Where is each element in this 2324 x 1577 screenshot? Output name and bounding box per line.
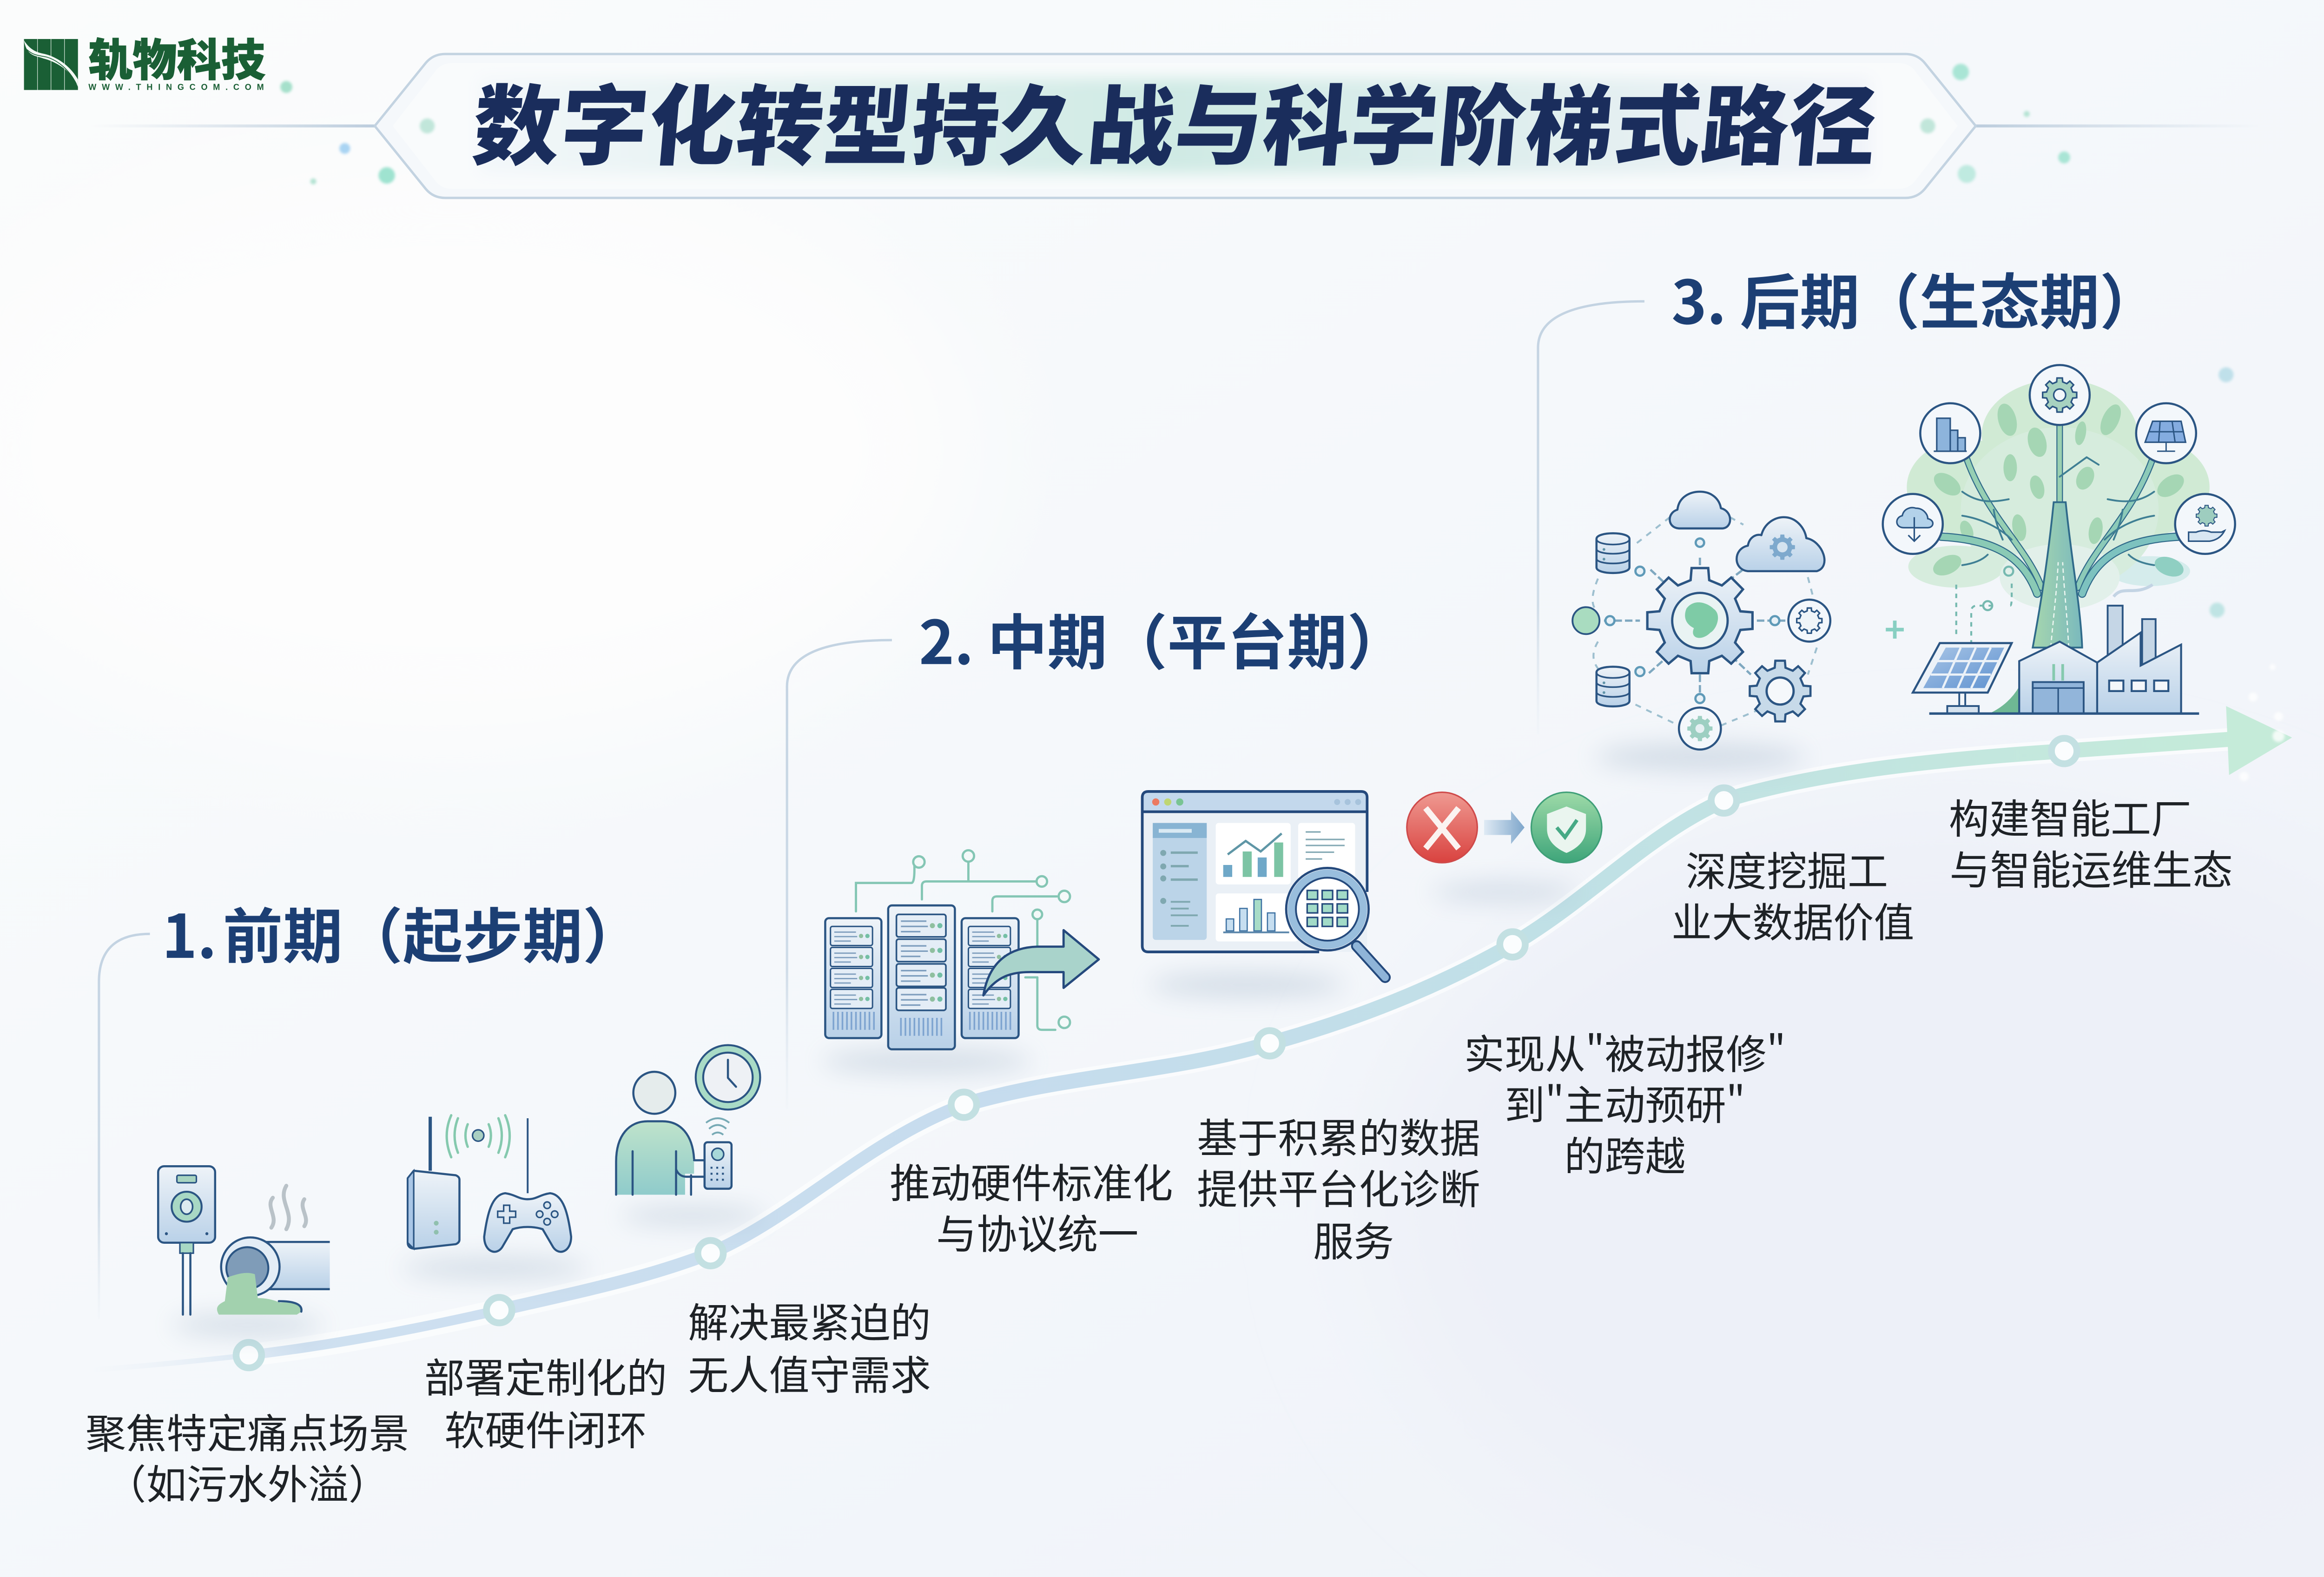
milestone text: 构建智能工厂与智能运维生态: 与智能运维生态	[1949, 838, 2233, 897]
title text: 数字化转型持久战与科学阶梯式路径	[469, 57, 1882, 183]
milestone text: 实现从被动报修到主动预研的跨越: 到"主动预研"	[1505, 1073, 1745, 1132]
trunk	[2033, 502, 2082, 647]
path milestone nodes	[236, 738, 2077, 1368]
tree base root	[1989, 686, 2019, 713]
milestone text: 构建智能工厂与智能运维生态: 构建智能工厂	[1949, 787, 2192, 845]
icon: server racks	[825, 850, 1099, 1049]
stage 3 heading: 3. 后期（生态期）	[1671, 255, 2159, 342]
top cloud	[1670, 492, 1730, 528]
migration arrow	[984, 930, 1099, 996]
chart cards	[1216, 823, 1291, 884]
stage 2 heading: 2. 中期（平台期）	[919, 595, 1407, 682]
icon circles on branches	[1883, 365, 2235, 554]
sidebar	[1153, 823, 1207, 940]
icon: diagnostic dashboard	[1142, 792, 1385, 977]
milestone text: 基于积累的数据提供平台化诊断服务: 基于积累的数据	[1197, 1106, 1480, 1165]
milestone text: 聚焦特定痛点场景: 聚焦特定痛点场景	[86, 1402, 409, 1460]
branches	[1941, 424, 2178, 594]
stage 1 heading: 1. 前期（起步期）	[162, 889, 643, 976]
icon: person with remote and clock	[616, 1045, 760, 1195]
central gear	[1647, 568, 1752, 673]
magnifier	[1357, 946, 1385, 977]
icon: digital ecosystem tree	[1883, 365, 2235, 713]
milestone text: 实现从被动报修到主动预研的跨越: 实现从"被动报修"	[1464, 1023, 1786, 1081]
canopy	[1907, 379, 2210, 610]
icon: router and gamepad	[408, 1115, 571, 1252]
smoke	[2113, 585, 2152, 597]
ground shadows	[172, 744, 1805, 1336]
icon: sewage sensor and pipe	[158, 1166, 330, 1315]
milestone text: 部署定制化的软硬件闭环: 部署定制化的	[424, 1346, 667, 1405]
milestone text: 推动硬件标准化与协议统一: 推动硬件标准化	[890, 1151, 1173, 1210]
logo name: 轨物科技	[88, 25, 265, 89]
milestone text: 部署定制化的软硬件闭环: 软硬件闭环	[444, 1399, 647, 1457]
milestone text: 解决最紧迫的无人值守需求: 无人值守需求	[688, 1343, 931, 1402]
leaves	[1930, 401, 2188, 580]
databases	[1597, 533, 1630, 573]
secondary gear	[1750, 661, 1810, 721]
node circles	[1572, 607, 1599, 634]
logo url: WWW.THINGCOM.COM	[88, 83, 264, 92]
steam	[271, 1186, 306, 1229]
ground line	[1929, 713, 2199, 714]
title banner	[90, 54, 2260, 198]
circuit traces	[856, 862, 1057, 1030]
milestone text: 解决最紧迫的无人值守需求: 解决最紧迫的	[688, 1291, 931, 1349]
milestone text: 聚焦特定痛点场景: （如污水外溢）	[106, 1452, 389, 1511]
decorative dots	[280, 64, 2233, 618]
growth path arrow	[90, 664, 2292, 1370]
tree to ground connectors	[1956, 583, 2012, 645]
network links	[1592, 517, 1817, 726]
icon: fault to healthy transition	[1407, 792, 1602, 863]
factory	[2108, 606, 2156, 674]
logo	[24, 25, 265, 92]
logo mark	[24, 39, 78, 90]
right cloud	[1736, 517, 1824, 571]
stage brackets	[99, 301, 1644, 1319]
solar panel	[1913, 643, 2012, 693]
milestone text: 基于积累的数据提供平台化诊断服务: 服务	[1313, 1210, 1394, 1268]
icon: industrial data network	[1572, 492, 1830, 750]
milestone text: 实现从被动报修到主动预研的跨越: 的跨越	[1564, 1124, 1686, 1183]
milestone text: 深度挖掘工业大数据价值: 业大数据价值	[1671, 891, 1914, 949]
milestone text: 推动硬件标准化与协议统一: 与协议统一	[936, 1202, 1138, 1261]
milestone text: 深度挖掘工业大数据价值: 深度挖掘工	[1686, 839, 1888, 898]
milestone text: 基于积累的数据提供平台化诊断服务: 提供平台化诊断	[1197, 1157, 1480, 1216]
